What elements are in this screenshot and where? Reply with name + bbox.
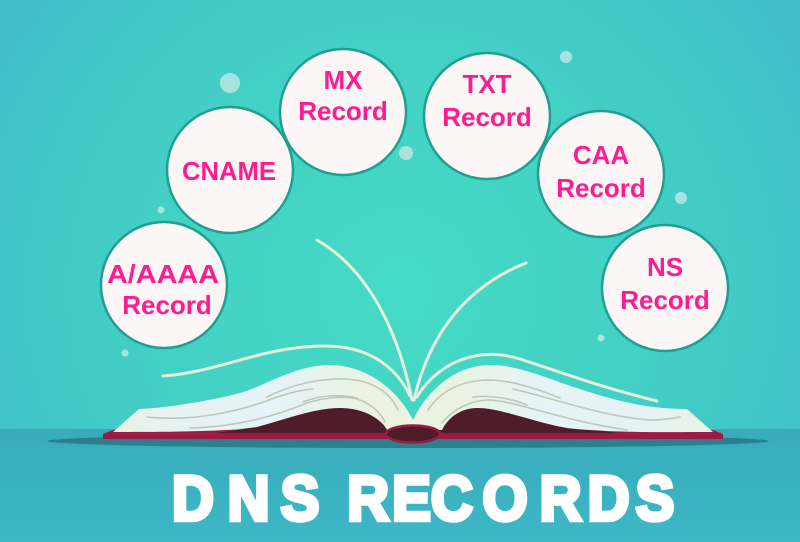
- floor shadow: [47, 434, 769, 448]
- right pages: [413, 365, 713, 432]
- circle: NS Record: NS: [647, 252, 683, 282]
- left pages: [113, 365, 413, 432]
- page lines: [147, 379, 680, 430]
- circle: CAA Record: [538, 111, 664, 237]
- circle: CNAME: [167, 107, 293, 233]
- book interior left: [215, 403, 392, 433]
- title: DNS RECORDS: [172, 463, 674, 534]
- circle: A/AAAA Record: A/AAAA: [107, 259, 219, 289]
- circle: MX Record: [280, 49, 406, 175]
- circle: MX Record: Record: [298, 96, 388, 126]
- circle: TXT Record: Record: [442, 102, 532, 132]
- circle: CAA Record: Record: [556, 173, 646, 203]
- book: [103, 365, 723, 442]
- circle: CNAME: CNAME: [182, 156, 276, 186]
- circle: A/AAAA Record: [101, 222, 227, 348]
- floor: [0, 429, 800, 542]
- book cover: [103, 430, 723, 439]
- circle: MX Record: MX: [324, 65, 363, 95]
- decorative bubbles: [122, 51, 687, 356]
- book spine: [386, 426, 440, 442]
- book interior right: [435, 403, 620, 433]
- circle: TXT Record: [424, 53, 550, 179]
- flying pages: [163, 240, 657, 401]
- circle: A/AAAA Record: Record: [122, 290, 212, 320]
- circle: CAA Record: CAA: [573, 140, 629, 170]
- circle: TXT Record: TXT: [462, 69, 512, 99]
- circle: NS Record: [602, 225, 728, 351]
- circle: NS Record: Record: [620, 285, 710, 315]
